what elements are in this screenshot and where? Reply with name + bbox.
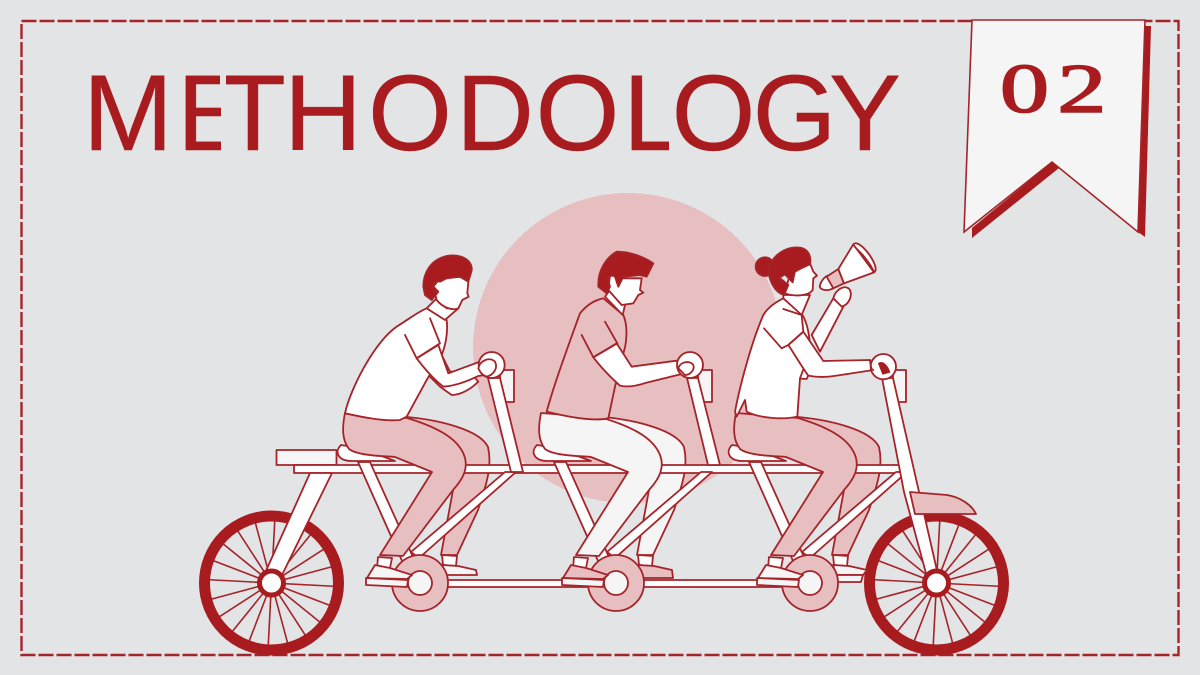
rider 2 lower body — [534, 413, 662, 587]
megaphone — [820, 243, 876, 290]
rear fork — [265, 473, 332, 577]
handlebar stem 1 — [488, 378, 523, 472]
front fork and stem — [882, 378, 938, 577]
diagonal tube 2 — [607, 472, 712, 558]
far leg rider 2 — [603, 417, 686, 578]
handlebar grip — [677, 352, 703, 378]
rear rack — [276, 450, 336, 465]
seat tube 1 — [358, 462, 417, 572]
crank 2 — [588, 555, 644, 611]
rider 2 upper body — [547, 252, 703, 419]
rider 1 lower body — [338, 413, 466, 587]
handlebar bag 1 — [500, 370, 514, 402]
crank 3 — [782, 555, 838, 611]
crank 1 — [392, 555, 448, 611]
raised arm — [812, 298, 843, 352]
lower chain tube — [425, 580, 810, 587]
far hand detail — [797, 367, 810, 379]
rear wheel — [204, 516, 338, 650]
pink background circle — [473, 193, 783, 503]
handlebar bag 2 — [698, 370, 712, 402]
front hub — [924, 571, 948, 595]
handlebar stem 2 — [687, 378, 720, 465]
top tube — [294, 465, 904, 473]
handlebar grip — [479, 352, 505, 378]
bicycle frame — [265, 370, 976, 611]
ribbon badge with number — [964, 20, 1151, 238]
rider 3 upper body — [735, 243, 896, 418]
diagonal tube 3 — [802, 472, 907, 558]
hair — [768, 247, 810, 295]
section number: 02 — [1000, 50, 1106, 128]
front wheel — [870, 516, 1004, 650]
rear hub — [260, 571, 284, 595]
title: METHODOLOGY — [83, 52, 901, 173]
seat tube 2 — [554, 462, 613, 572]
rider 3 lower body — [729, 413, 857, 587]
hair — [598, 252, 653, 293]
far leg rider 1 — [407, 417, 490, 575]
rider 1 upper body — [345, 255, 505, 420]
seat tube 3 — [749, 462, 808, 572]
diagonal tube 1 — [411, 472, 516, 558]
front mudguard — [910, 492, 976, 514]
hair — [423, 255, 472, 300]
far leg rider 3 — [798, 417, 881, 582]
handlebar bag 3 — [893, 370, 906, 402]
handlebar grip — [871, 354, 896, 379]
hair bun — [756, 257, 774, 276]
hand on megaphone — [833, 287, 851, 307]
